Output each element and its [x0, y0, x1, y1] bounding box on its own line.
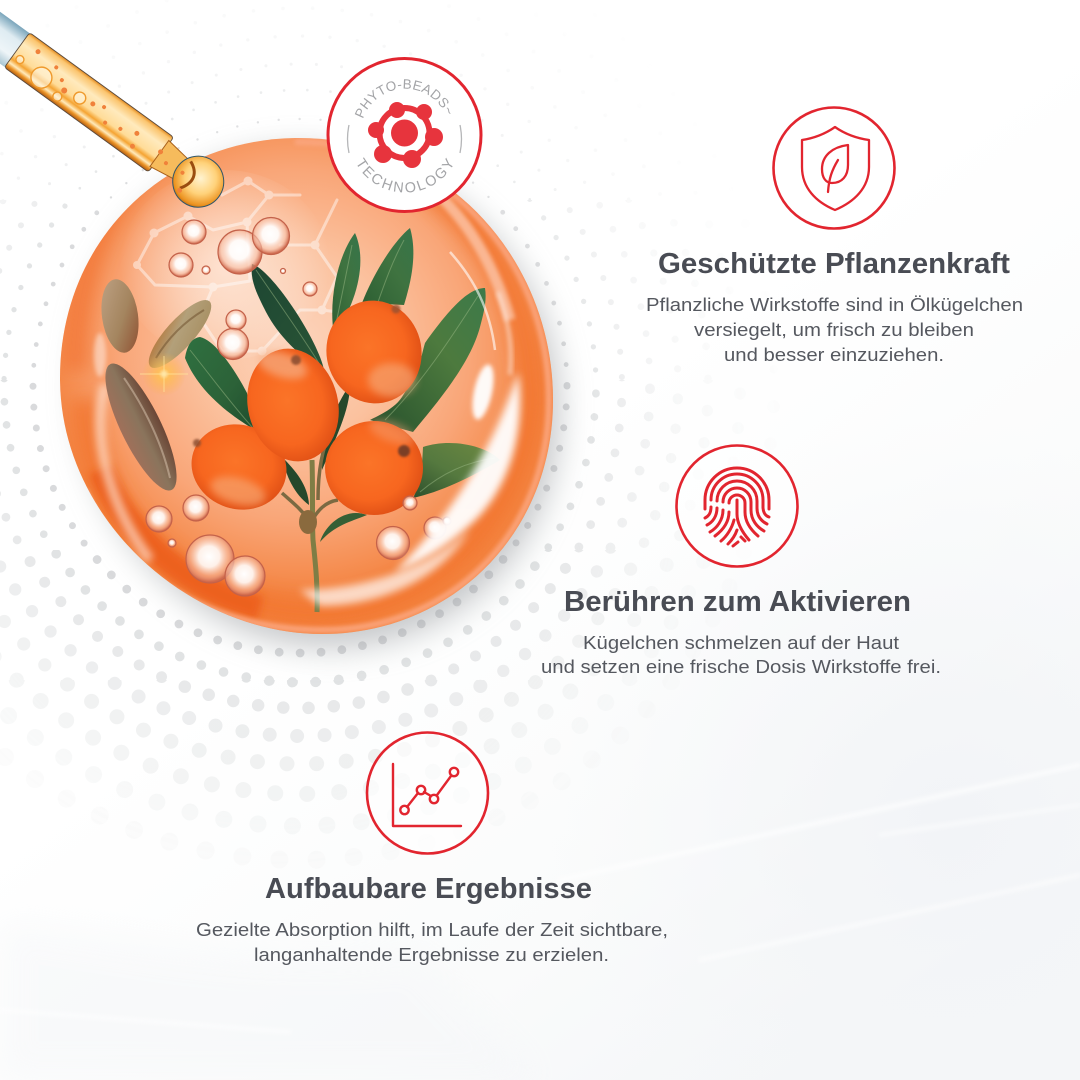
heading: Berühren zum Aktivieren — [564, 586, 911, 618]
bubbles — [146, 218, 451, 596]
description — [646, 295, 1023, 365]
background dot pattern — [0, 44, 672, 802]
description: langanhaltende Ergebnisse zu erzielen. — [254, 945, 609, 965]
feature 1: protected plant power — [646, 108, 1023, 365]
feature 3: buildable results — [196, 732, 668, 965]
sparkle — [140, 352, 188, 396]
badge: Phyto-Beads Technology — [326, 57, 482, 213]
description: Kügelchen schmelzen auf der Haut — [583, 633, 899, 653]
glass section — [0, 4, 30, 68]
icon: fingerprint — [676, 446, 798, 566]
heading: Geschützte Pflanzenkraft — [658, 248, 1010, 280]
description: Pflanzliche Wirkstoffe sind in Ölkügelchen — [646, 295, 1023, 315]
molecule icon — [368, 102, 443, 168]
bead body — [50, 130, 560, 640]
molecule lines — [133, 176, 370, 356]
badge text — [354, 79, 452, 192]
seeds — [92, 277, 220, 499]
badge text: TECHNOLOGY — [358, 158, 452, 192]
berries — [180, 293, 430, 522]
badge text: PHYTO-BEADS~ — [354, 79, 451, 118]
heading: Aufbaubare Ergebnisse — [265, 873, 592, 905]
description: versiegelt, um frisch zu bleiben — [694, 320, 974, 340]
feature 2: touch to activate — [541, 446, 941, 677]
description: und besser einzuziehen. — [724, 345, 944, 365]
icon: line chart — [367, 732, 488, 854]
dropper — [0, 0, 234, 217]
description: und setzen eine frische Dosis Wirkstoffe frei. — [541, 657, 941, 677]
description — [541, 633, 941, 677]
leaves and stem — [185, 228, 500, 612]
description: Gezielte Absorption hilft, im Laufe der Zeit sichtbare, — [196, 920, 668, 940]
sphere shadow — [80, 150, 560, 648]
illustration: oil bead with sea buckthorn — [50, 130, 560, 640]
icon: shield with leaf — [774, 108, 894, 228]
tube with oil — [4, 33, 174, 172]
description — [196, 920, 668, 965]
bead highlights — [94, 252, 520, 606]
